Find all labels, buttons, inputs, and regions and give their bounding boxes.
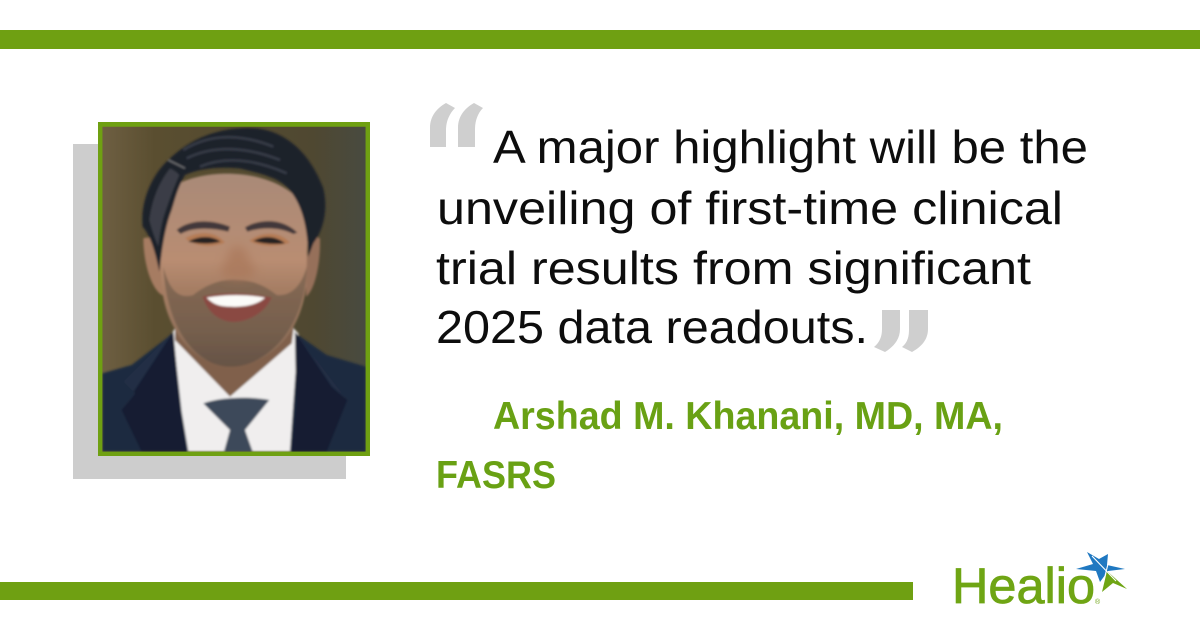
beard: [163, 267, 307, 367]
face: [158, 174, 308, 366]
shirt: [170, 327, 300, 452]
lapels: [122, 332, 347, 452]
neck: [175, 317, 295, 397]
top green bar: [0, 30, 1200, 49]
eye sockets: [185, 233, 290, 246]
nose shadow: [223, 246, 253, 277]
quote text: trial results from significant: [436, 242, 1031, 294]
eyebrows: [177, 221, 297, 234]
bottom green bar: [0, 582, 913, 600]
quote text: A major highlight will be the: [493, 121, 1088, 173]
attribution: FASRS: [436, 454, 556, 497]
portrait shadow panel: [73, 144, 346, 479]
jacket: [102, 332, 366, 452]
quote text: unveiling of first-time clinical: [437, 182, 1063, 234]
mouth: [203, 293, 272, 322]
eyes: [188, 237, 285, 244]
tie: [203, 398, 269, 452]
opening quotation mark: [430, 103, 483, 147]
portrait photo with green frame: [98, 122, 370, 456]
Healio logo: ®: [1095, 598, 1101, 606]
ears: [143, 238, 164, 296]
Healio logo: Healio: [952, 558, 1095, 614]
attribution: Arshad M. Khanani, MD, MA,: [493, 395, 1003, 438]
quote text: 2025 data readouts.: [436, 301, 868, 353]
closing quotation mark: [874, 310, 928, 352]
attribution: [436, 395, 1003, 497]
hair: [142, 128, 325, 272]
quote text: [436, 121, 1088, 353]
